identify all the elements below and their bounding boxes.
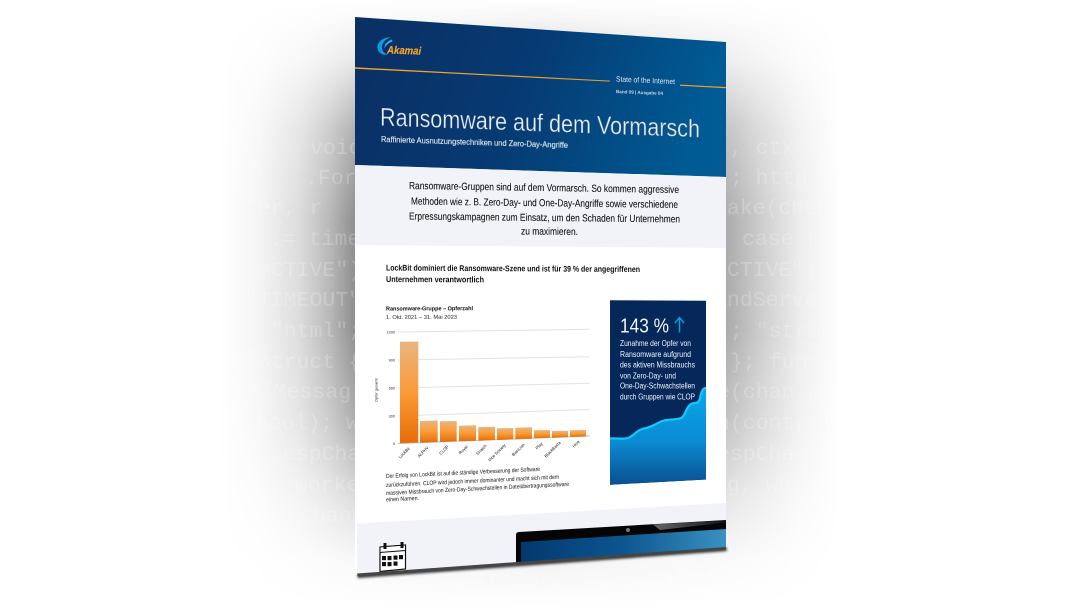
footer background — [357, 503, 726, 575]
stat description: Ransomware aufgrund — [620, 350, 691, 359]
y axis labels: 1200 — [387, 330, 395, 334]
background code text: "ACTIVE") — [245, 259, 361, 283]
background code text: ; struct { — [232, 351, 361, 375]
chart caption: einen Namen. — [386, 496, 419, 503]
y axis title: Opfer gesamt — [374, 378, 378, 402]
heading — [386, 263, 640, 284]
card background — [610, 300, 706, 485]
background code text: respCha — [270, 443, 360, 467]
grid lines — [398, 329, 590, 444]
background code text: .For — [305, 167, 357, 191]
y axis labels: 600 — [389, 386, 395, 390]
background code text: ; http — [730, 167, 807, 191]
bars — [400, 342, 586, 443]
x axis labels: CLOP — [438, 444, 450, 456]
x axis labels: Hive — [571, 439, 581, 449]
stat description: Zunahme der Opfer von — [620, 339, 691, 348]
logo: Akamai — [377, 37, 422, 58]
background code text: }; func m — [730, 351, 846, 375]
x axis labels: Royal — [458, 444, 469, 455]
y axis labels: 300 — [389, 414, 395, 418]
background code text: void — [310, 137, 362, 161]
laptop gloss — [653, 520, 726, 530]
background code text: ACTIVE"); — [714, 259, 830, 283]
y axis labels — [387, 330, 395, 446]
background code text: case res — [742, 228, 845, 252]
document — [355, 17, 726, 575]
intro text — [409, 181, 680, 238]
panel: header — [355, 17, 726, 177]
chart caption — [386, 467, 570, 503]
orange rule right — [680, 85, 726, 88]
issue label: Band 09 | Ausgabe 04 — [616, 89, 663, 96]
laptop screen — [521, 529, 726, 562]
background code text: espChan — [717, 443, 807, 467]
chart date range: 1. Okt. 2021 – 31. Mai 2023 — [386, 315, 457, 321]
background code text: (bool); w — [243, 412, 359, 436]
title: Ransomware auf dem Vormarsch — [380, 104, 700, 143]
background code text: AndServe( — [714, 289, 830, 313]
background code text: n(control — [717, 412, 833, 436]
background code text: worke — [295, 474, 360, 498]
background code text: := time — [270, 228, 360, 252]
x axis labels: LockBit — [397, 446, 411, 459]
series label: State of the Internet — [616, 75, 676, 86]
laptop — [516, 520, 726, 564]
subtitle: Raffinierte Ausnutzungstechniken und Zero-Day-Angriffe — [381, 134, 568, 150]
chart caption: massiven Missbrauch von Zero-Day-Schwachstellen in Dateiübertragungssoftware — [386, 482, 570, 497]
background code text: ; "html"; — [245, 320, 361, 344]
document bottom edge — [357, 547, 726, 576]
stat description: von Zero-Day- und — [620, 372, 676, 380]
x axis labels: Vice Society — [487, 442, 507, 462]
stat description — [620, 339, 695, 402]
background code text: ; "string — [730, 320, 846, 344]
icon: up arrow — [675, 318, 684, 332]
series label — [616, 75, 676, 96]
header background — [355, 17, 726, 177]
chart caption: Der Erfolg von LockBit ist auf die ständige Verbesserung der Software — [386, 467, 541, 480]
background code text: , ctx — [730, 137, 795, 161]
x axis labels: Snatch — [475, 443, 488, 456]
orange rule left — [355, 67, 610, 82]
x axis labels: ALPHV — [416, 445, 430, 458]
background code text: g, wo — [727, 474, 792, 498]
background code text: "TIMEOUT" — [245, 289, 361, 313]
document shadow base — [357, 547, 727, 578]
background code text: rolMessag — [235, 381, 351, 405]
background code text: chan; — [300, 505, 365, 529]
intro background — [355, 165, 726, 248]
y axis labels: 900 — [389, 358, 395, 362]
chart title: Ransomware-Gruppe – Opferzahl — [386, 306, 473, 312]
background code text: strings.Split(r.Host — [462, 567, 720, 591]
page background — [355, 17, 726, 575]
intro text: zu maximieren. — [521, 227, 578, 238]
background code text — [232, 137, 846, 591]
y axis labels: 0 — [393, 442, 395, 446]
laptop camera — [626, 528, 630, 532]
x axis labels: BlackBasta — [543, 440, 562, 459]
stat description: des aktiven Missbrauchs — [620, 360, 695, 370]
stat value: 143 % — [620, 314, 669, 338]
intro text: Ransomware-Gruppen sind auf dem Vormarsch. So kommen aggressive — [409, 181, 679, 196]
stat description: One-Day-Schwachstellen — [620, 382, 695, 390]
chart caption: zurückzuführen. CLOP wird jedoch immer dominanter und macht sich mit dem — [386, 475, 559, 489]
logo: Akamai: Akamai — [386, 44, 422, 58]
area chart — [610, 388, 706, 485]
intro text: Methoden wie z. B. Zero-Day- und One-Day-Angriffe sowie verschiedene — [411, 197, 678, 211]
panel: bar chart — [374, 306, 590, 503]
heading: LockBit dominiert die Ransomware-Szene und ist für 39 % der angegriffenen — [386, 263, 640, 274]
x axis labels: BianLian — [511, 442, 526, 457]
panel: stat card — [610, 300, 706, 485]
heading: Unternehmen verantwortlich — [386, 274, 484, 284]
x axis labels — [397, 439, 581, 462]
intro text: Erpressungskampagnen zum Einsatz, um den Schaden für Unternehmen — [409, 212, 680, 225]
background code text: e(chan bo — [717, 381, 833, 405]
panel: footer section — [357, 503, 726, 575]
x axis labels: Play — [534, 441, 544, 450]
background code text: make(chan — [714, 197, 830, 221]
chart title — [386, 306, 473, 321]
panel: intro — [355, 165, 726, 248]
background shadow glow — [254, 16, 821, 575]
background code text: ter, r — [245, 197, 322, 221]
stat description: durch Gruppen wie CLOP — [620, 392, 695, 402]
icon: calendar — [380, 542, 406, 572]
